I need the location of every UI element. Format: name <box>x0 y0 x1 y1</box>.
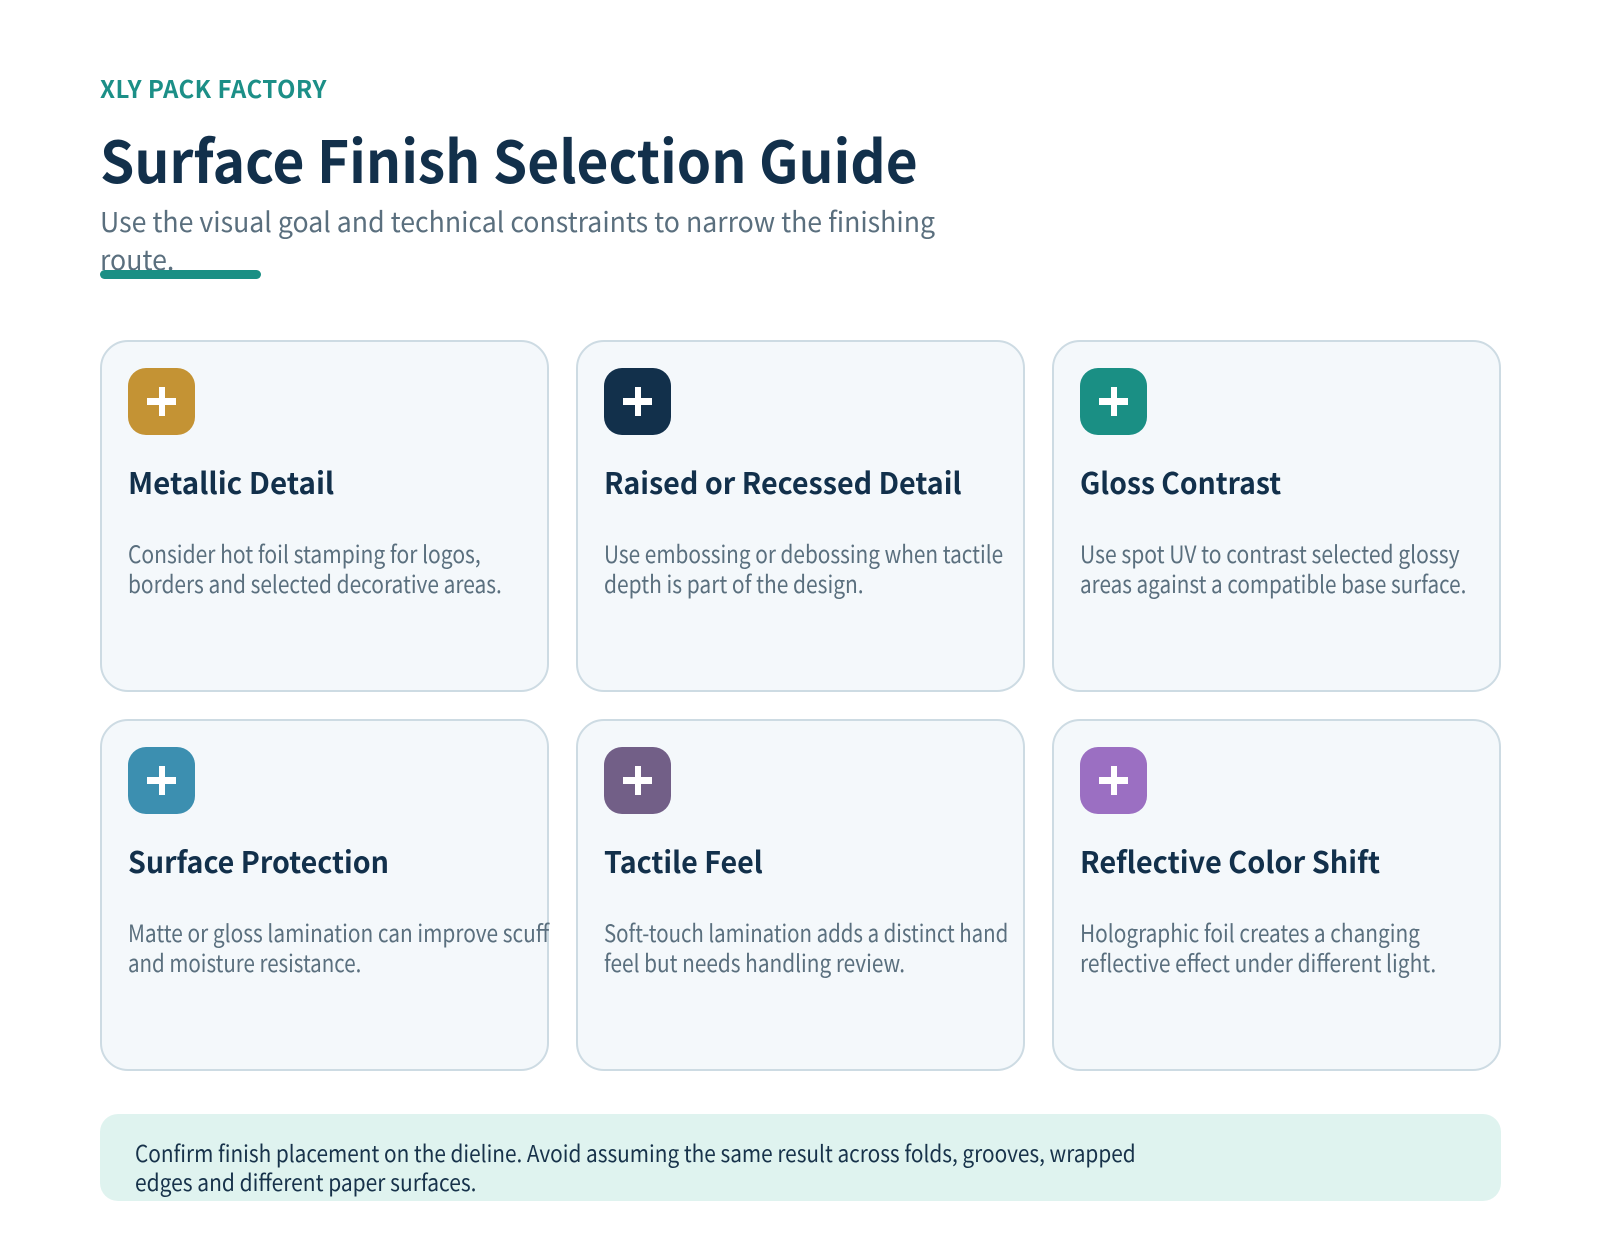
text: metallic detail: Consider hot foil stamping for logos, <box>128 535 481 570</box>
text: tactile feel: feel but needs handling review. <box>604 944 905 979</box>
panel: raised or recessed detail <box>576 340 1025 692</box>
text: metallic detail: borders and selected decorative areas. <box>128 565 502 600</box>
text: reflective color shift: reflective effect under different light. <box>1080 944 1436 979</box>
kicker: XLY PACK FACTORY <box>100 70 327 105</box>
heading: gloss contrast: Gloss Contrast <box>1080 461 1281 503</box>
text: gloss contrast: Use spot UV to contrast selected glossy <box>1080 535 1460 570</box>
accent bar <box>100 270 261 279</box>
subtitle <box>100 200 935 278</box>
icon: plus blue <box>128 747 195 814</box>
heading: tactile feel: Tactile Feel <box>604 840 763 882</box>
text: gloss contrast <box>1080 535 1466 600</box>
text: raised or recessed detail: Use embossing or debossing when tactile <box>604 535 1003 570</box>
text: surface protection <box>128 914 550 979</box>
icon: plus violet <box>1080 747 1147 814</box>
callout text: edges and different paper surfaces. <box>135 1164 476 1198</box>
heading: raised or recessed detail: Raised or Recessed Detail <box>604 461 961 503</box>
panel: metallic detail <box>100 340 549 692</box>
heading: surface protection: Surface Protection <box>128 840 389 882</box>
callout text <box>135 1135 1136 1198</box>
text: reflective color shift <box>1080 914 1436 979</box>
text: raised or recessed detail: depth is part of the design. <box>604 565 864 600</box>
panel: tactile feel <box>576 719 1025 1071</box>
title: Surface Finish Selection Guide <box>100 116 918 200</box>
subtitle: route. <box>100 238 174 278</box>
icon: plus plum <box>604 747 671 814</box>
heading: reflective color shift: Reflective Color Shift <box>1080 840 1380 882</box>
icon: plus navy <box>604 368 671 435</box>
icon: plus gold <box>128 368 195 435</box>
callout <box>100 1114 1501 1201</box>
icon: plus teal <box>1080 368 1147 435</box>
callout text: Confirm finish placement on the dieline. Avoid assuming the same result across folds, grooves, wrapped <box>135 1135 1136 1169</box>
text: surface protection: Matte or gloss lamination can improve scuff <box>128 914 549 949</box>
text: tactile feel <box>604 914 1008 979</box>
panel: gloss contrast <box>1052 340 1501 692</box>
panel: surface protection <box>100 719 549 1071</box>
text: raised or recessed detail <box>604 535 1003 600</box>
text: metallic detail <box>128 535 502 600</box>
text: tactile feel: Soft-touch lamination adds a distinct hand <box>604 914 1008 949</box>
panel: reflective color shift <box>1052 719 1501 1071</box>
text: reflective color shift: Holographic foil creates a changing <box>1080 914 1420 949</box>
subtitle: Use the visual goal and technical constraints to narrow the finishing <box>100 200 935 240</box>
text: gloss contrast: areas against a compatible base surface. <box>1080 565 1466 600</box>
text: surface protection: and moisture resistance. <box>128 944 361 979</box>
heading: metallic detail: Metallic Detail <box>128 461 334 503</box>
